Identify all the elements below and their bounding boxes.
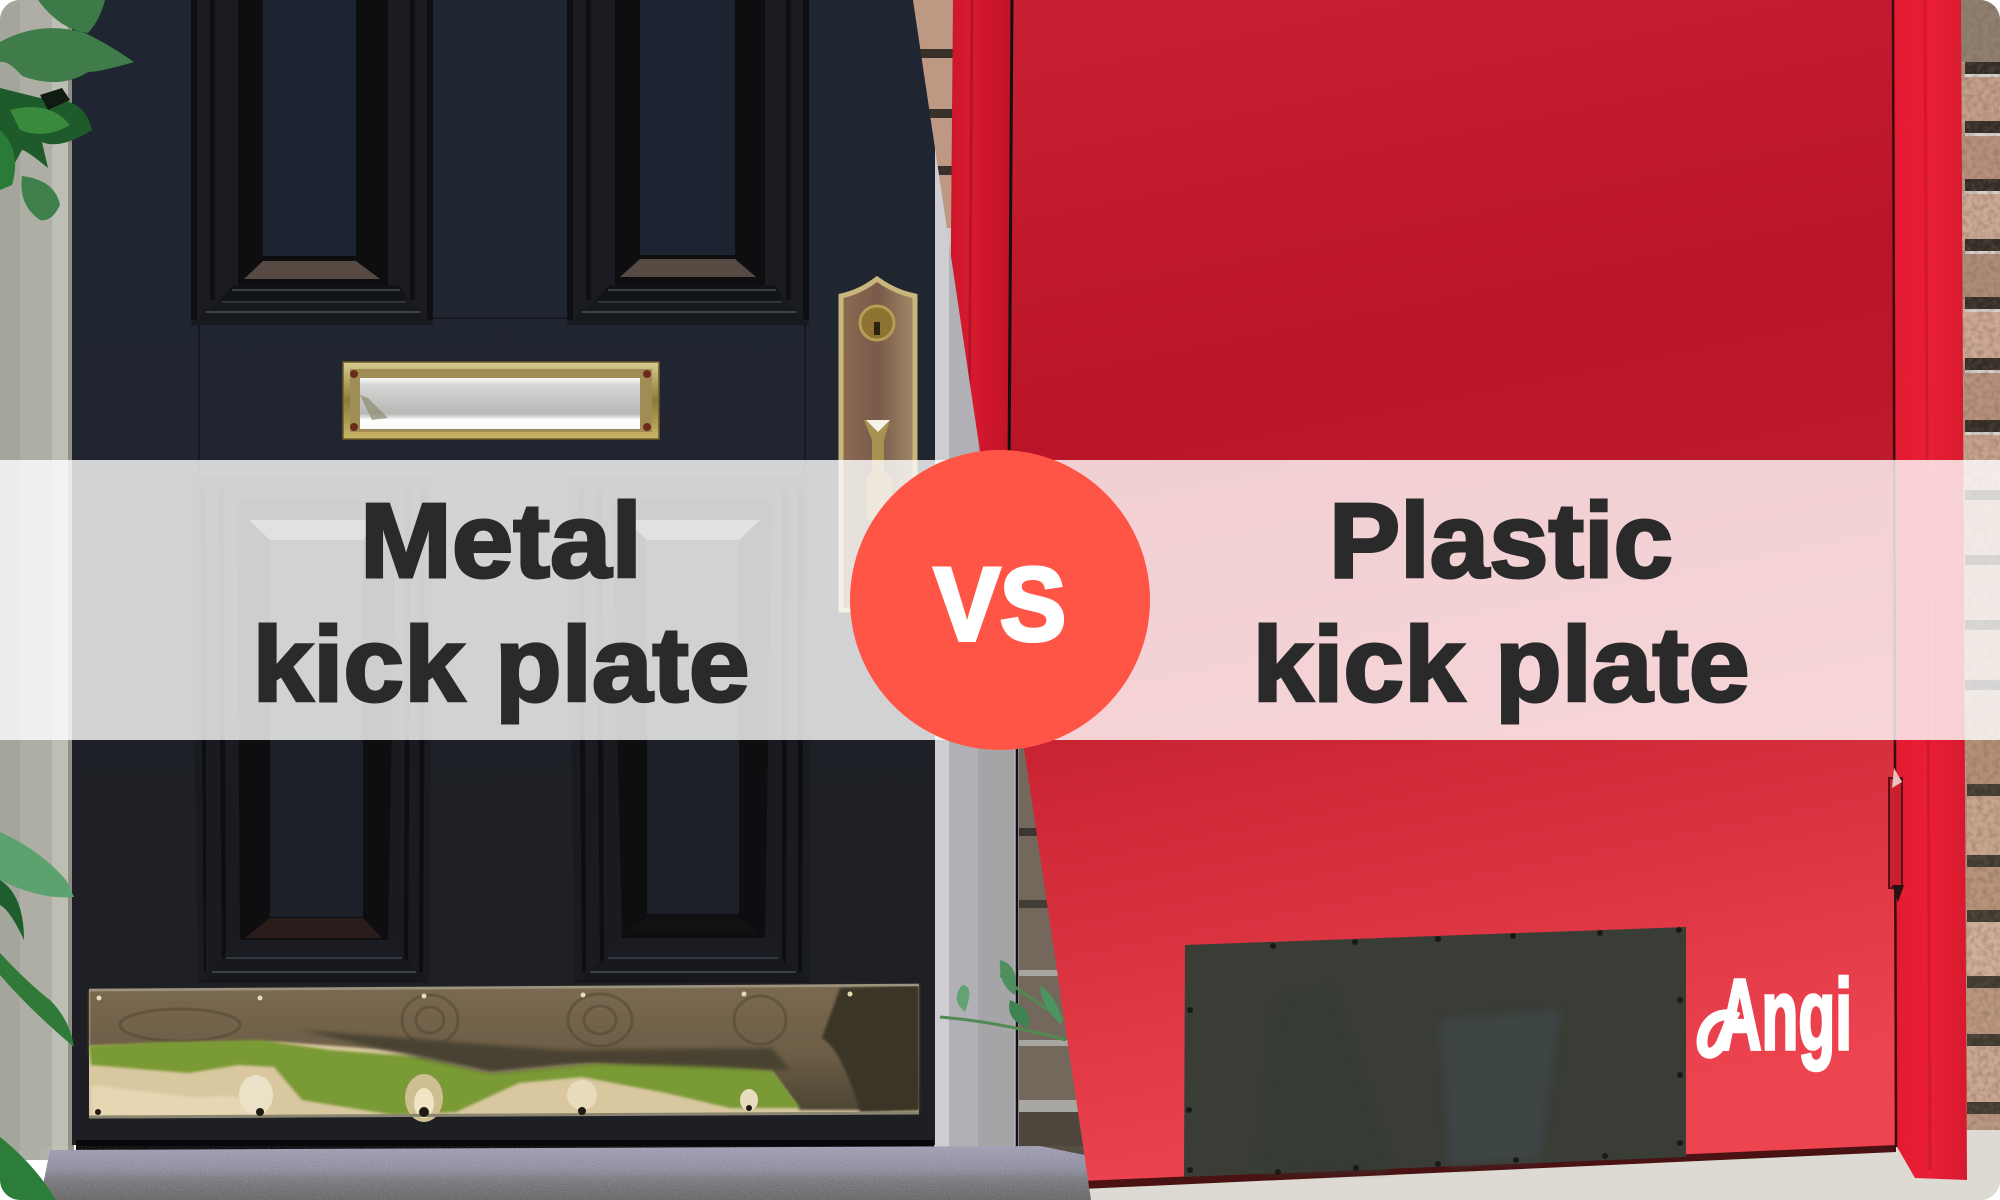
- left door frame: [949, 0, 1012, 470]
- lower left door panel: [198, 520, 428, 983]
- door bottom shadow: [1060, 1145, 1896, 1190]
- lower right door panel: [576, 520, 810, 983]
- upper left door panel: [191, 0, 433, 325]
- badge: VS circle: [850, 450, 1150, 750]
- heading: Metal kick plate: kick plate: [252, 606, 750, 724]
- heading: Metal kick plate: [252, 482, 750, 724]
- black door: [72, 0, 935, 1145]
- red door: [1009, 0, 1896, 1186]
- concrete step: [40, 1146, 1110, 1200]
- band: translucent white title strip: [0, 460, 2000, 740]
- heading: Plastic kick plate: [1252, 482, 1750, 724]
- heading: Metal kick plate: Metal: [360, 482, 642, 600]
- door bottom shadow: [76, 1140, 934, 1151]
- logo: Angi: Angi: [1718, 959, 1852, 1071]
- panel: plastic kick plate photo: [905, 0, 2000, 1200]
- metal kick plate: [89, 985, 919, 1122]
- door trim left: [0, 0, 74, 1160]
- leaves top left: [0, 0, 134, 220]
- door handle plate: [841, 279, 915, 610]
- hinge: [1889, 768, 1904, 902]
- door edge lines: [969, 0, 1930, 1170]
- heading: Plastic kick plate: Plastic: [1329, 482, 1673, 600]
- door rail lines: [199, 318, 805, 476]
- upper right door panel: [567, 0, 809, 325]
- badge: VS circle: VS: [934, 547, 1066, 663]
- heading: Plastic kick plate: kick plate: [1252, 606, 1750, 724]
- leaves bottom left: [0, 832, 74, 1200]
- sprig right of trim: [940, 960, 1066, 1040]
- logo: Angi: [1696, 974, 1849, 1072]
- sidewalk: [1050, 1130, 2000, 1200]
- brick wall behind red door: [905, 0, 2000, 1200]
- panel: metal kick plate photo: [0, 0, 1110, 1200]
- door trim right: [930, 115, 1019, 1146]
- mail slot: [343, 362, 659, 439]
- black plastic kick plate: [1184, 927, 1686, 1177]
- right door frame: [1893, 0, 1967, 1180]
- brick wall lower: [1019, 748, 1085, 1160]
